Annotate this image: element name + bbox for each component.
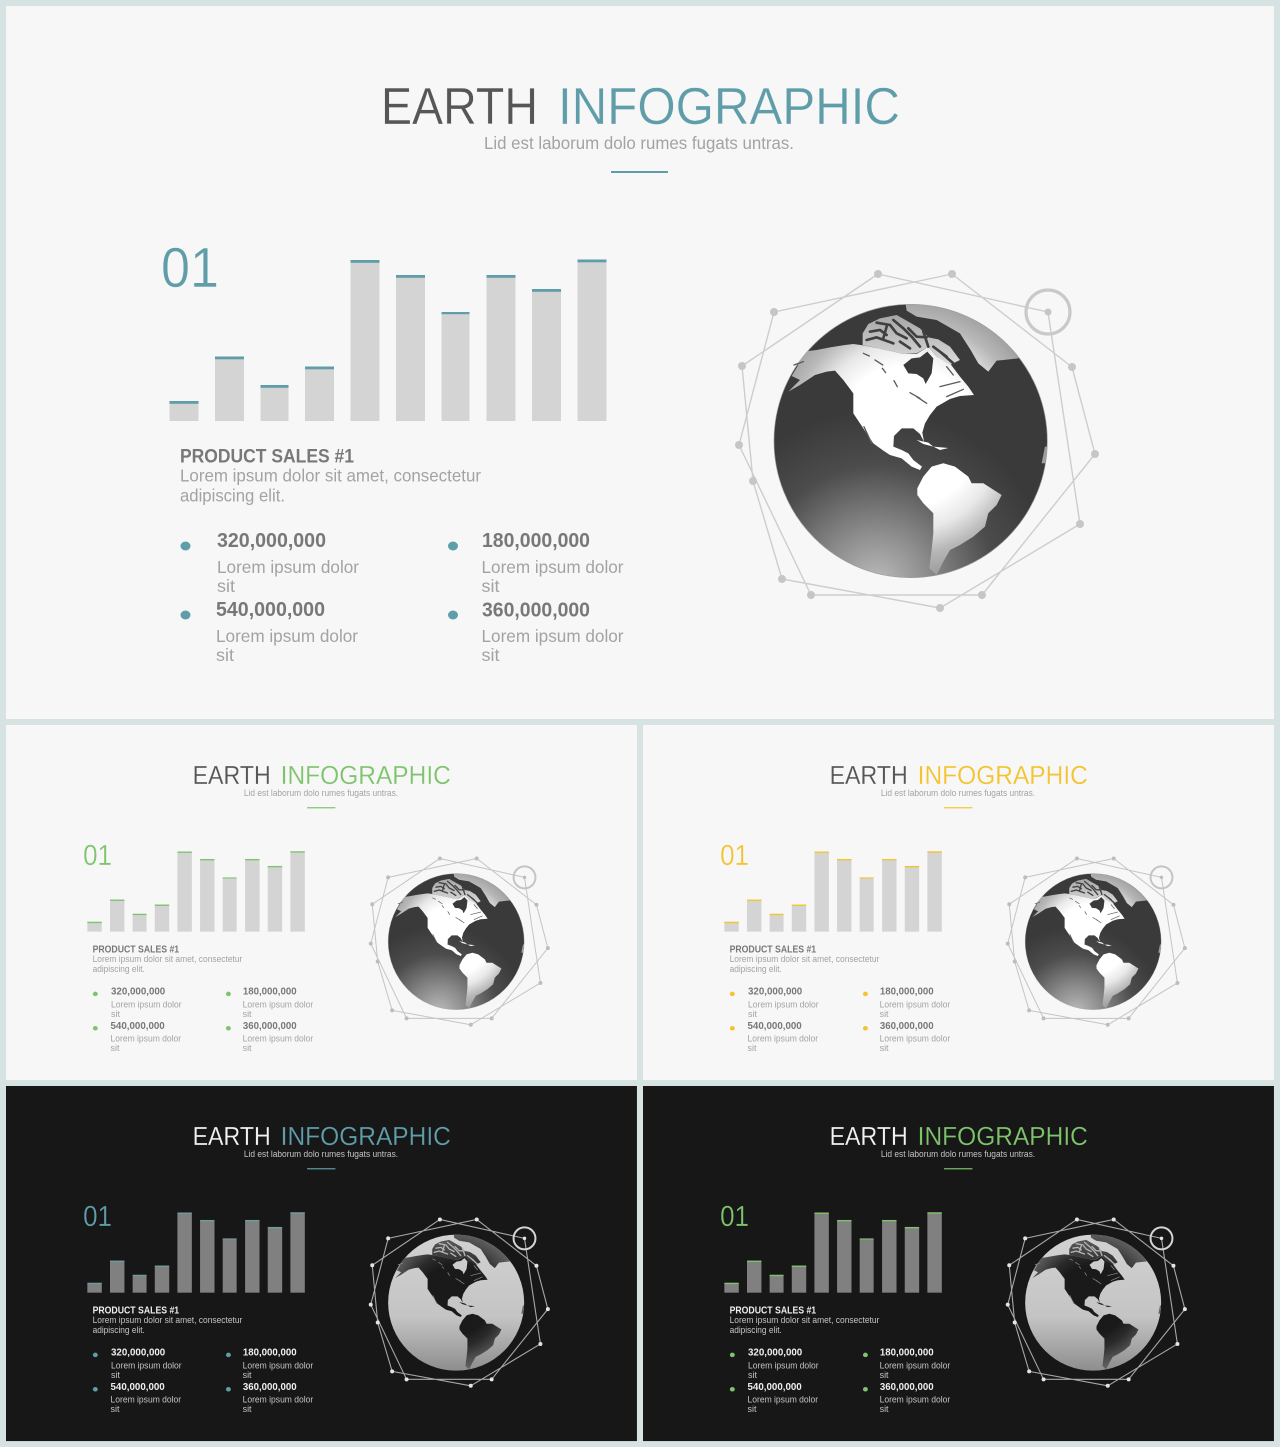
icon: earth globe [774, 300, 1048, 578]
stat: 320,000,000 [93, 986, 182, 1019]
panel: light green slide [6, 725, 637, 1080]
stat: 180,000,000: Lorem ipsum dolor [482, 557, 624, 577]
panel: light yellow slide [643, 725, 1274, 1080]
icon: earth globe [388, 871, 525, 1010]
stat: 320,000,000: 320,000,000 [111, 1347, 166, 1358]
stat: 360,000,000: 360,000,000 [880, 1382, 934, 1393]
stat: 540,000,000: 540,000,000 [216, 599, 325, 621]
stat: 180,000,000: sit [243, 1009, 252, 1019]
stat: 320,000,000: sit [111, 1370, 121, 1380]
stat: 320,000,000: 320,000,000 [748, 1347, 803, 1358]
title underline [944, 807, 972, 808]
stat: 180,000,000: sit [880, 1370, 889, 1380]
stat: 540,000,000: 540,000,000 [747, 1021, 802, 1032]
stat: 540,000,000: 540,000,000 [110, 1382, 165, 1393]
product description: adipiscing elit. [93, 964, 145, 974]
stat: 180,000,000: Lorem ipsum dolor [880, 1360, 950, 1370]
stat: 360,000,000 [863, 1382, 950, 1414]
stat: 360,000,000: Lorem ipsum dolor [243, 1395, 313, 1405]
stat: 180,000,000: Lorem ipsum dolor [880, 999, 950, 1009]
icon: network ring around globe [1006, 1217, 1187, 1388]
icon: earth globe [388, 1232, 525, 1371]
product description [730, 954, 879, 974]
title: EARTH [830, 1123, 908, 1151]
title underline [307, 1168, 335, 1169]
stat: 320,000,000 [730, 1347, 819, 1380]
stat: 540,000,000: 540,000,000 [110, 1021, 165, 1032]
title: INFOGRAPHIC [281, 1123, 451, 1151]
product description: adipiscing elit. [730, 964, 782, 974]
stat: 360,000,000: sit [243, 1404, 252, 1414]
stat: 180,000,000: 180,000,000 [880, 1347, 934, 1358]
title: INFOGRAPHIC [281, 762, 451, 790]
section number: 01 [83, 1201, 112, 1233]
stat: 540,000,000: sit [747, 1404, 757, 1414]
product description: Lorem ipsum dolor sit amet, consectetur [93, 954, 242, 964]
product heading: PRODUCT SALES #1 [180, 446, 354, 468]
stat: 360,000,000: Lorem ipsum dolor [243, 1034, 313, 1044]
title: INFOGRAPHIC [558, 77, 900, 135]
product heading: PRODUCT SALES #1 [93, 944, 180, 955]
stat: 180,000,000 [226, 1347, 313, 1380]
product description [180, 466, 481, 506]
stat: 320,000,000 [730, 986, 819, 1019]
stat: 540,000,000 [730, 1382, 818, 1414]
title underline [307, 807, 335, 808]
stat: 360,000,000: sit [880, 1404, 889, 1414]
stat: 540,000,000 [730, 1021, 818, 1053]
subtitle: Lid est laborum dolo rumes fugats untras. [244, 788, 398, 798]
title: EARTH [830, 762, 908, 790]
product description: adipiscing elit. [180, 486, 285, 506]
stat: 540,000,000 [93, 1382, 181, 1414]
stat: 360,000,000 [448, 600, 624, 665]
stat: 320,000,000: Lorem ipsum dolor [748, 999, 819, 1009]
title [830, 1123, 1088, 1151]
stat: 180,000,000 [863, 1347, 950, 1380]
product description: adipiscing elit. [93, 1325, 145, 1335]
stat: 320,000,000 [180, 530, 359, 596]
stat: 320,000,000: sit [111, 1009, 121, 1019]
stat: 320,000,000: sit [217, 576, 235, 596]
section number: 01 [720, 840, 749, 872]
stat: 320,000,000 [93, 1347, 182, 1380]
stat: 540,000,000: Lorem ipsum dolor [747, 1034, 818, 1044]
product heading: PRODUCT SALES #1 [730, 1305, 817, 1316]
product description [93, 954, 242, 974]
subtitle: Lid est laborum dolo rumes fugats untras. [244, 1149, 398, 1159]
panel: main light teal slide [6, 6, 1274, 719]
stat: 360,000,000: Lorem ipsum dolor [880, 1395, 950, 1405]
stat: 540,000,000 [93, 1021, 181, 1053]
title: EARTH [381, 77, 538, 135]
subtitle: Lid est laborum dolo rumes fugats untras. [484, 133, 794, 153]
panel: dark green slide [643, 1086, 1274, 1441]
stat: 180,000,000: 180,000,000 [243, 1347, 297, 1358]
stat: 540,000,000: sit [110, 1043, 120, 1053]
stat: 180,000,000: 180,000,000 [243, 986, 297, 997]
subtitle: Lid est laborum dolo rumes fugats untras. [881, 788, 1035, 798]
icon: earth globe [1025, 1232, 1162, 1371]
stat: 320,000,000: Lorem ipsum dolor [111, 1360, 182, 1370]
stat: 540,000,000: Lorem ipsum dolor [747, 1395, 818, 1405]
icon: network ring around globe [369, 856, 550, 1027]
panel: dark teal slide [6, 1086, 637, 1441]
bar chart [170, 260, 606, 421]
stat: 360,000,000 [226, 1021, 313, 1053]
stat: 320,000,000: sit [748, 1370, 758, 1380]
stat: 320,000,000: Lorem ipsum dolor [111, 999, 182, 1009]
stat: 360,000,000: sit [880, 1043, 889, 1053]
title: EARTH [193, 762, 271, 790]
stat: 180,000,000: Lorem ipsum dolor [243, 999, 313, 1009]
stat: 360,000,000 [863, 1021, 950, 1053]
stat: 320,000,000: Lorem ipsum dolor [748, 1360, 819, 1370]
product description: Lorem ipsum dolor sit amet, consectetur [730, 1315, 879, 1325]
product heading: PRODUCT SALES #1 [730, 944, 817, 955]
title [193, 1123, 451, 1151]
section number: 01 [720, 1201, 749, 1233]
section number: 01 [83, 840, 112, 872]
icon: network ring around globe [735, 270, 1099, 612]
icon: network ring around globe [369, 1217, 550, 1388]
product description: Lorem ipsum dolor sit amet, consectetur [180, 466, 481, 486]
stat: 180,000,000 [226, 986, 313, 1019]
stat: 360,000,000: 360,000,000 [880, 1021, 934, 1032]
product description: Lorem ipsum dolor sit amet, consectetur [93, 1315, 242, 1325]
product description [93, 1315, 242, 1335]
stat: 180,000,000: Lorem ipsum dolor [243, 1360, 313, 1370]
stat: 320,000,000: 320,000,000 [111, 986, 166, 997]
title [193, 762, 451, 790]
title: INFOGRAPHIC [918, 1123, 1088, 1151]
stat: 320,000,000: Lorem ipsum dolor [217, 557, 359, 577]
bar chart [724, 851, 942, 932]
title underline [611, 171, 668, 173]
product description: adipiscing elit. [730, 1325, 782, 1335]
title: EARTH [193, 1123, 271, 1151]
stat: 360,000,000: sit [243, 1043, 252, 1053]
stat: 180,000,000 [863, 986, 950, 1019]
subtitle: Lid est laborum dolo rumes fugats untras. [881, 1149, 1035, 1159]
stat: 360,000,000: 360,000,000 [243, 1021, 297, 1032]
title [381, 77, 900, 135]
icon: network ring around globe [1006, 856, 1187, 1027]
title [830, 762, 1088, 790]
product heading: PRODUCT SALES #1 [93, 1305, 180, 1316]
stat: 540,000,000: Lorem ipsum dolor [110, 1034, 181, 1044]
stat: 320,000,000: 320,000,000 [217, 530, 326, 552]
stat: 360,000,000: 360,000,000 [243, 1382, 297, 1393]
stat: 180,000,000: sit [880, 1009, 889, 1019]
stat: 540,000,000: sit [747, 1043, 757, 1053]
bar chart [87, 851, 305, 932]
stat: 540,000,000: sit [216, 645, 234, 665]
icon: earth globe [1025, 871, 1162, 1010]
stat: 540,000,000 [180, 599, 358, 665]
bar chart [87, 1212, 305, 1293]
stat: 360,000,000: Lorem ipsum dolor [880, 1034, 950, 1044]
stat: 320,000,000: sit [748, 1009, 758, 1019]
product description [730, 1315, 879, 1335]
title: INFOGRAPHIC [918, 762, 1088, 790]
stat: 180,000,000: sit [243, 1370, 252, 1380]
section number: 01 [161, 236, 219, 300]
stat: 360,000,000: 360,000,000 [482, 600, 590, 622]
stat: 180,000,000: 180,000,000 [880, 986, 934, 997]
bar chart [724, 1212, 942, 1293]
stat: 320,000,000: 320,000,000 [748, 986, 803, 997]
stat: 180,000,000 [448, 530, 624, 596]
stat: 360,000,000: sit [482, 645, 500, 665]
stat: 180,000,000: 180,000,000 [482, 530, 590, 552]
product description: Lorem ipsum dolor sit amet, consectetur [730, 954, 879, 964]
stat: 540,000,000: Lorem ipsum dolor [110, 1395, 181, 1405]
stat: 360,000,000: Lorem ipsum dolor [482, 626, 624, 646]
stat: 540,000,000: Lorem ipsum dolor [216, 626, 358, 646]
title underline [944, 1168, 972, 1169]
stat: 540,000,000: 540,000,000 [747, 1382, 802, 1393]
stat: 540,000,000: sit [110, 1404, 120, 1414]
stat: 180,000,000: sit [482, 576, 500, 596]
stat: 360,000,000 [226, 1382, 313, 1414]
